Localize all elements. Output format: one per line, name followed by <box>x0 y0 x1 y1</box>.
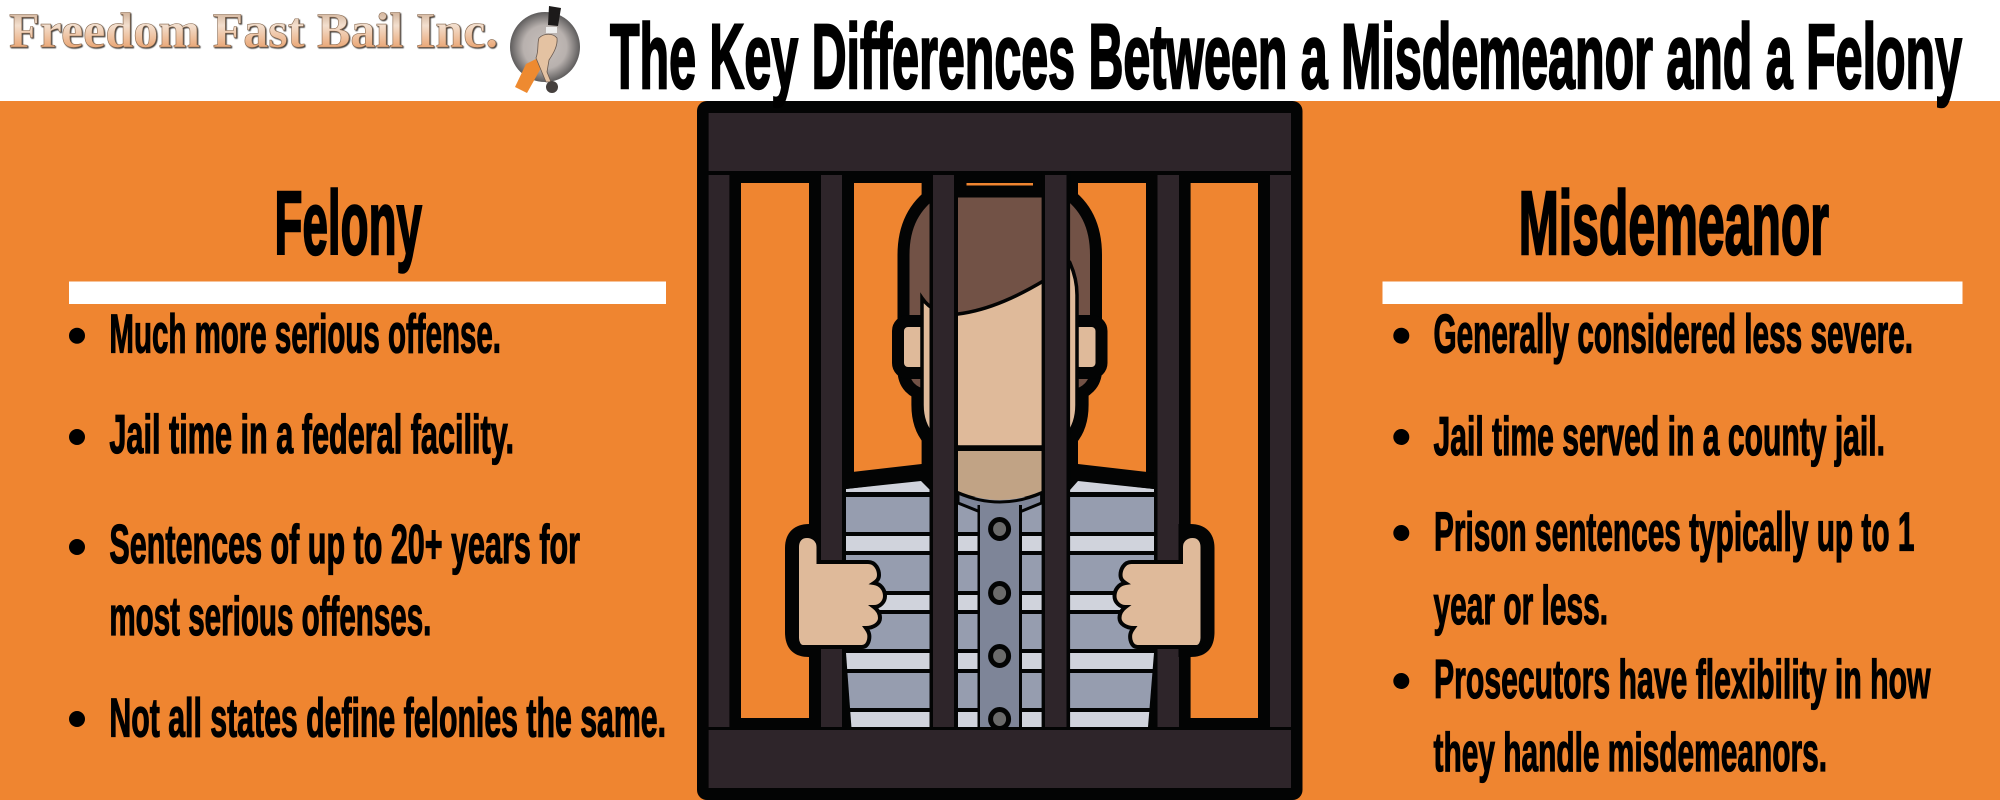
felony bullet list: Much more serious offense. <box>109 303 501 365</box>
divider bar: misdemeanor <box>1382 282 1962 304</box>
misdemeanor bullet list <box>1393 303 1931 783</box>
chin outline <box>917 385 1083 452</box>
cage bottom beam <box>709 730 1291 788</box>
panel: misdemeanor <box>1382 174 1962 783</box>
neck <box>958 451 1042 500</box>
shoulders outline <box>835 464 1165 730</box>
shirt buttons <box>991 520 1009 728</box>
striped shirt <box>840 475 1160 730</box>
right hand gripping bar <box>1114 524 1214 657</box>
cage vertical bars <box>709 171 1291 730</box>
cage window openings <box>741 183 1258 718</box>
misdemeanor bullet list: year or less. <box>1434 574 1608 636</box>
felony bullet list: Jail time in a federal facility. <box>109 403 514 465</box>
heading: felony: Felony <box>274 174 422 274</box>
header band <box>0 0 2000 101</box>
collar <box>958 493 1042 511</box>
felony bullet list: Not all states define felonies the same. <box>109 687 666 749</box>
face <box>922 263 1077 447</box>
prisoner figure <box>835 192 1165 730</box>
cage top beam <box>709 113 1291 171</box>
felony bullet list: most serious offenses. <box>109 585 431 647</box>
left ear <box>898 321 930 373</box>
felony bullet list <box>69 303 666 749</box>
right ear <box>1070 321 1102 373</box>
icon: logo bail hand <box>510 6 580 93</box>
left hand gripping bar <box>785 524 885 657</box>
jail cage frame <box>697 101 1302 800</box>
panel: felony <box>69 174 666 749</box>
felony bullet list: Sentences of up to 20+ years for <box>109 513 580 575</box>
divider bar: felony <box>69 282 666 304</box>
logo wordmark: Freedom Fast Bail Inc. <box>9 2 498 58</box>
placket <box>978 505 1022 727</box>
hair <box>904 192 1096 395</box>
